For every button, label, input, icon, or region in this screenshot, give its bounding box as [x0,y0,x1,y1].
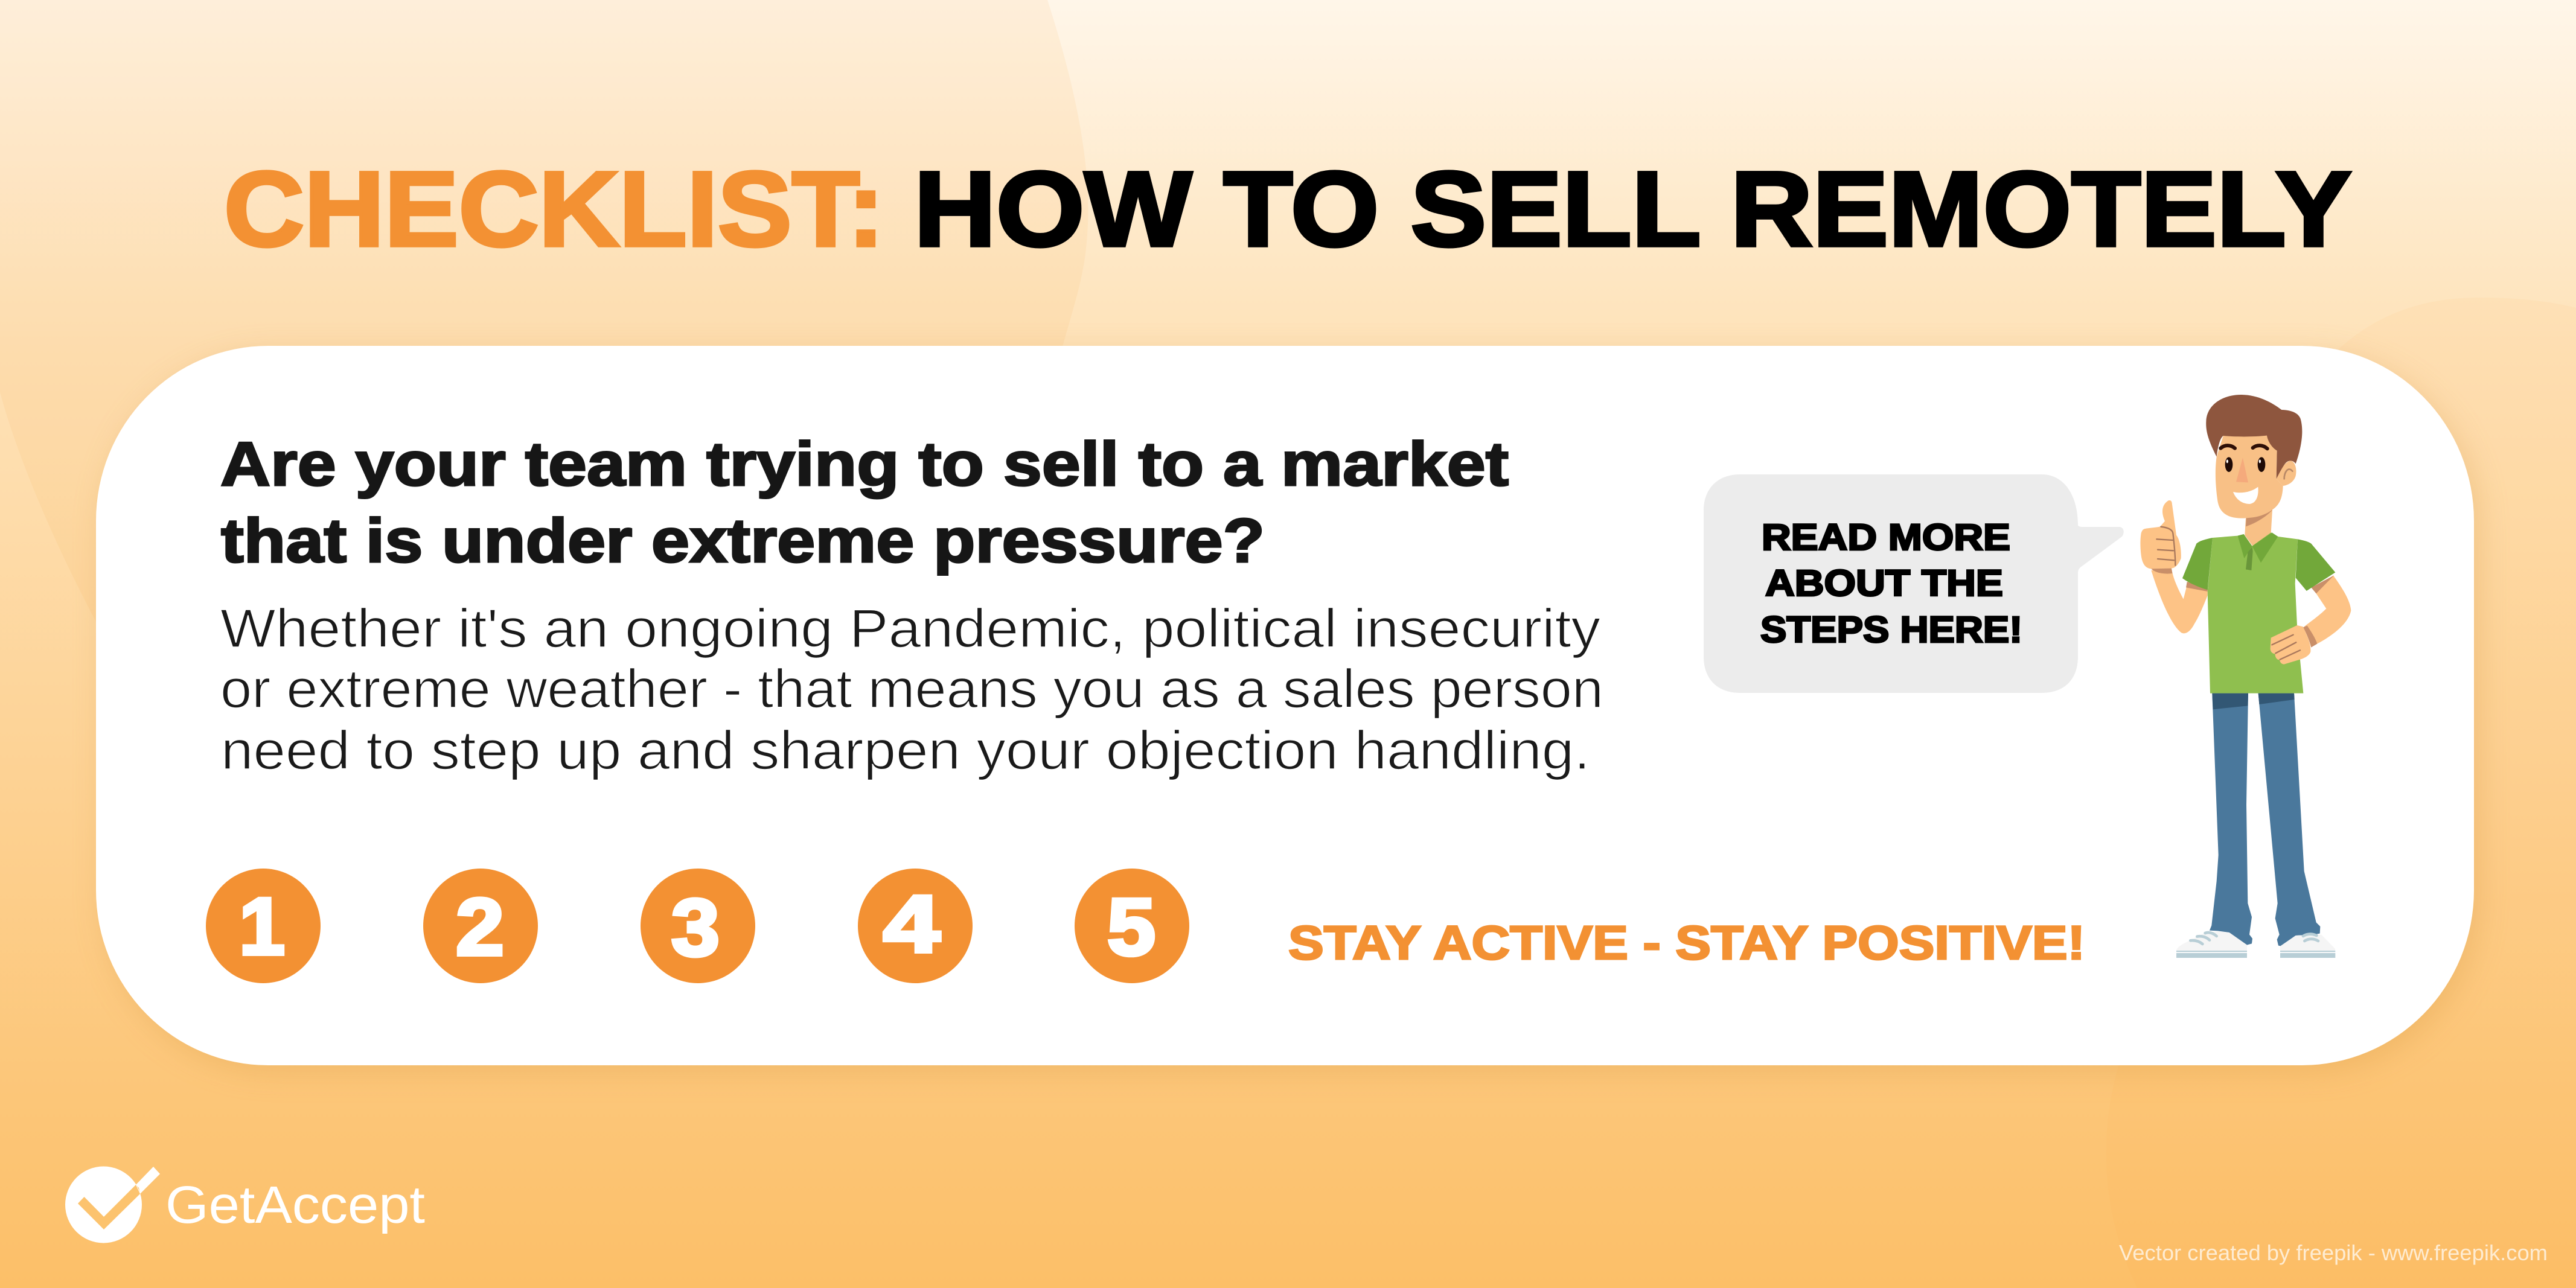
title: HOW TO SELL REMOTELY [914,150,2351,269]
body text: or extreme weather - that means you as a sales person [220,659,1603,719]
number 3 [641,869,755,983]
nose [2236,457,2248,482]
number 2 [423,869,538,983]
tagline: STAY ACTIVE - STAY POSITIVE! [1288,916,2085,969]
title: CHECKLIST: [224,150,884,269]
panel: white card [96,346,2474,1065]
number 2: 2 [456,882,504,972]
number 5: 5 [1107,882,1155,972]
bubble shape [1704,474,2124,693]
title [224,150,2351,269]
number 5 [1075,869,1189,983]
number 4 [858,869,973,983]
body text: need to step up and sharpen your objection handling. [221,721,1590,781]
number 1 [206,869,321,983]
bubble text: STEPS HERE! [1760,609,2022,650]
number 1: 1 [239,882,285,972]
bubble text: ABOUT THE [1765,563,2003,604]
ear [2277,461,2296,486]
right arm [2304,575,2351,644]
heading: that is under extreme pressure? [221,506,1265,575]
eyes [2225,457,2232,472]
logo icon: check mark circle [65,1166,160,1243]
heading [220,429,1509,575]
eyebrows [2220,445,2235,448]
face [2216,436,2283,518]
background blob: right side [2106,298,2576,1288]
bubble text: READ MORE [1762,517,2010,558]
speech bubble [1704,474,2124,693]
thumbs-up hand [2140,500,2181,569]
numbered circles [206,869,1189,983]
hand on hip [2303,626,2317,648]
body text [220,599,1603,781]
neck [2245,510,2272,546]
number 4: 4 [883,879,940,969]
shirt [2208,532,2303,693]
left arm [2151,569,2208,633]
number 3: 3 [671,883,720,973]
credit line: Vector created by freepik - www.freepik.com [2119,1240,2548,1265]
illustration: man giving thumbs up [2140,395,2351,958]
smile [2233,487,2258,504]
heading: Are your team trying to sell to a market [220,429,1509,499]
logo wordmark: GetAccept [165,1176,425,1234]
hair [2206,395,2302,479]
background blob: top left [0,0,1088,622]
legs [2176,693,2335,958]
bubble text [1760,517,2022,650]
logo: GetAccept [65,1166,425,1243]
upper body [2140,395,2351,693]
body text: Whether it's an ongoing Pandemic, political insecurity [220,599,1600,659]
